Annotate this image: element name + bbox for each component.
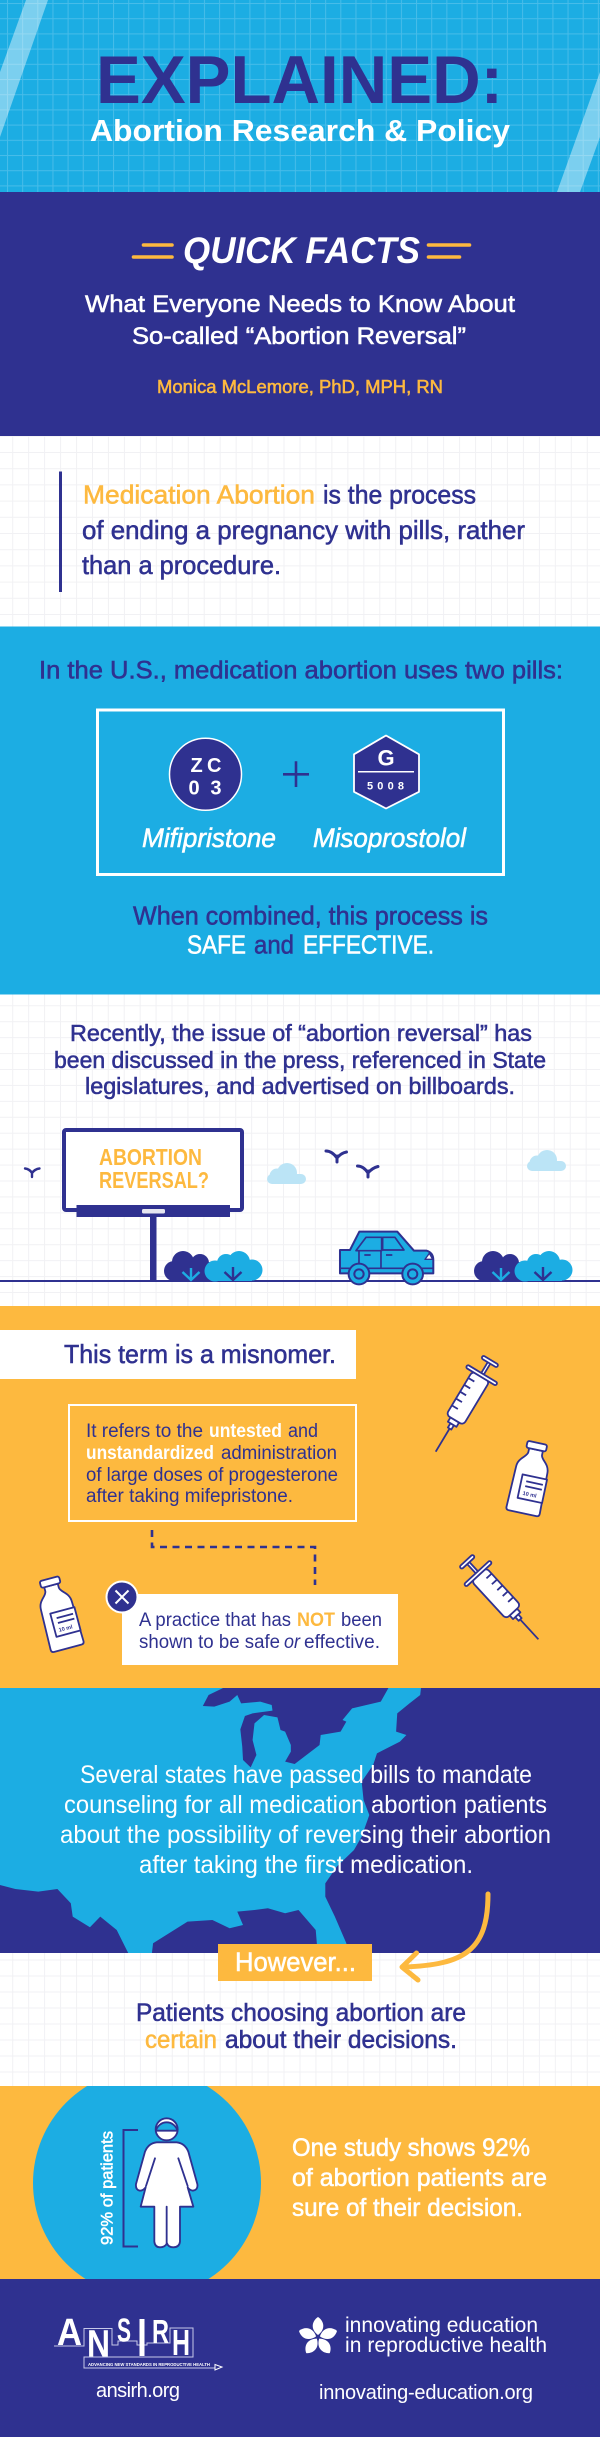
- callout: shown to be safe: [139, 1632, 280, 1653]
- icon: vial right: [506, 1439, 554, 1517]
- map text: counseling for all medication abortion patients: [64, 1791, 547, 1819]
- panel: footer: [0, 2279, 600, 2437]
- icon: flower: [297, 2317, 339, 2356]
- logo: ANSIRH: A: [57, 2312, 82, 2354]
- billboard: [64, 1130, 242, 1281]
- heading banner: [0, 1330, 356, 1379]
- callout: A practice that has: [139, 1610, 291, 1631]
- icon: misoprostol pill: [354, 736, 419, 808]
- billboard: REVERSAL?: [99, 1167, 209, 1193]
- explanation box: of large doses of progesterone: [86, 1465, 338, 1486]
- intro text: legislatures, and advertised on billboards.: [85, 1073, 515, 1099]
- definition text: of ending a pregnancy with pills, rather: [82, 515, 525, 545]
- subheading: [85, 291, 515, 350]
- icon: syringe bottom: [453, 1549, 551, 1651]
- author: Monica McLemore, PhD, MPH, RN: [157, 377, 443, 397]
- panel: study statistic: [0, 2086, 600, 2279]
- logo: ANSIRH: ADVANCING NEW STANDARDS IN REPRODUCTIVE HEALTH: [88, 2362, 210, 2367]
- pill box: [98, 710, 504, 874]
- combined statement: When combined, this process is: [133, 900, 488, 930]
- panel: however: [0, 1894, 600, 2086]
- title: EXPLAINED:: [96, 42, 503, 118]
- however label: However...: [235, 1947, 356, 1977]
- panel: two pills: [0, 626, 600, 994]
- heading: quick facts: QUICK FACTS: [183, 230, 420, 271]
- circle backdrop: [33, 2086, 261, 2279]
- icon: x mark: [106, 1582, 138, 1612]
- icon: mifepristone pill: 0 3: [188, 777, 222, 799]
- definition text: [82, 480, 525, 580]
- icon: vial left: 10 ml: [58, 1624, 74, 1634]
- intro text: been discussed in the press, referenced in State: [54, 1047, 546, 1073]
- logo: ANSIRH: R: [152, 2313, 169, 2350]
- logo: ANSIRH: S: [117, 2312, 131, 2348]
- definition text: is the process: [323, 480, 476, 510]
- map text: [60, 1761, 551, 1879]
- map: eastern United States: [0, 1688, 421, 1953]
- statistic text: One study shows 92%: [292, 2134, 530, 2162]
- link: innovating education: innovating-education.org: [319, 2382, 533, 2404]
- icon: mifepristone pill: Z C: [190, 755, 222, 777]
- ground line: [0, 1280, 600, 1282]
- subtitle: Abortion Research & Policy: [90, 113, 511, 148]
- dashed connector: [152, 1530, 315, 1585]
- map text: after taking the first medication.: [139, 1851, 473, 1879]
- wordmark: innovating education: [345, 2314, 538, 2337]
- subheading: So-called “Abortion Reversal”: [132, 323, 466, 350]
- icon: birds: [25, 1151, 378, 1177]
- explanation box: [69, 1405, 356, 1521]
- map text: about the possibility of reversing their abortion: [60, 1821, 551, 1849]
- wordmark: in reproductive health: [345, 2334, 547, 2357]
- icon: bushes left: [164, 1251, 262, 1282]
- explanation box: untested: [209, 1421, 282, 1442]
- icon: syringe top: [421, 1351, 506, 1461]
- statistic text: sure of their decision.: [292, 2194, 523, 2222]
- combined statement: [133, 900, 488, 960]
- combined statement: EFFECTIVE.: [303, 930, 434, 960]
- icon: plus: [283, 761, 309, 787]
- heading banner: This term is a misnomer.: [64, 1339, 336, 1369]
- combined statement: and: [254, 930, 294, 960]
- intro text: Recently, the issue of “abortion reversal” has: [70, 1020, 532, 1046]
- panel: misnomer: [0, 1306, 600, 1688]
- icon: cloud right: [527, 1150, 566, 1171]
- icon: misoprostol pill: 5008: [367, 781, 404, 793]
- explanation box: and: [288, 1421, 318, 1442]
- explanation box: unstandardized: [86, 1443, 214, 1464]
- explanation box: after taking mifepristone.: [86, 1486, 293, 1507]
- certainty statement: [136, 1999, 466, 2054]
- icon: patient figure: [136, 2118, 197, 2247]
- combined statement: SAFE: [187, 930, 246, 960]
- statistic text: [292, 2134, 547, 2222]
- icon: cloud left: [267, 1163, 306, 1184]
- icon: vial right: 10 ml: [522, 1491, 537, 1500]
- billboard: ABORTION: [99, 1144, 202, 1170]
- callout: [106, 1582, 398, 1665]
- map text: Several states have passed bills to mandate: [80, 1761, 532, 1789]
- explanation box: administration: [221, 1443, 337, 1464]
- label: mifepristone: Mifipristone: [142, 823, 276, 853]
- icon: vial left: [33, 1574, 84, 1653]
- intro text: [54, 1020, 546, 1099]
- callout: or: [284, 1632, 301, 1653]
- rotated label: 92% of patients: [98, 2131, 116, 2245]
- panel: definition: [0, 436, 600, 626]
- statistic text: of abortion patients are: [292, 2164, 547, 2192]
- callout: effective.: [304, 1632, 380, 1653]
- logo: ANSIRH: H: [172, 2322, 190, 2363]
- icon: bushes right: [474, 1251, 572, 1282]
- logo: ANSIRH: N: [87, 2324, 110, 2366]
- certainty statement: certain: [145, 2026, 217, 2054]
- certainty statement: about their decisions.: [225, 2026, 457, 2054]
- icon: car: [340, 1232, 433, 1284]
- label: misoprostol: Misoprostolol: [313, 823, 467, 853]
- arrow: [402, 1894, 488, 1980]
- explanation box: It refers to the: [86, 1421, 203, 1442]
- bracket: [124, 2130, 138, 2246]
- icon: misoprostol pill: G: [377, 746, 395, 771]
- panel: quick facts: [0, 192, 600, 436]
- wordmark: [345, 2314, 547, 2357]
- certainty statement: Patients choosing abortion are: [136, 1999, 466, 2027]
- subheading: What Everyone Needs to Know About: [85, 291, 515, 318]
- panel: state bills map: [0, 1688, 600, 1953]
- link: ansirh: ansirh.org: [96, 2380, 180, 2402]
- panel: header: [0, 0, 600, 192]
- panel: billboard scene: [0, 994, 600, 1306]
- heading: two pills: In the U.S., medication abortion uses two pills:: [39, 656, 563, 684]
- icon: mifepristone pill: [170, 738, 242, 810]
- logo: ANSIRH: [54, 2312, 222, 2370]
- callout: been: [341, 1610, 382, 1631]
- callout: NOT: [297, 1610, 335, 1631]
- definition text: Medication Abortion: [83, 480, 315, 510]
- definition text: than a procedure.: [82, 550, 281, 580]
- however label: [218, 1944, 372, 1981]
